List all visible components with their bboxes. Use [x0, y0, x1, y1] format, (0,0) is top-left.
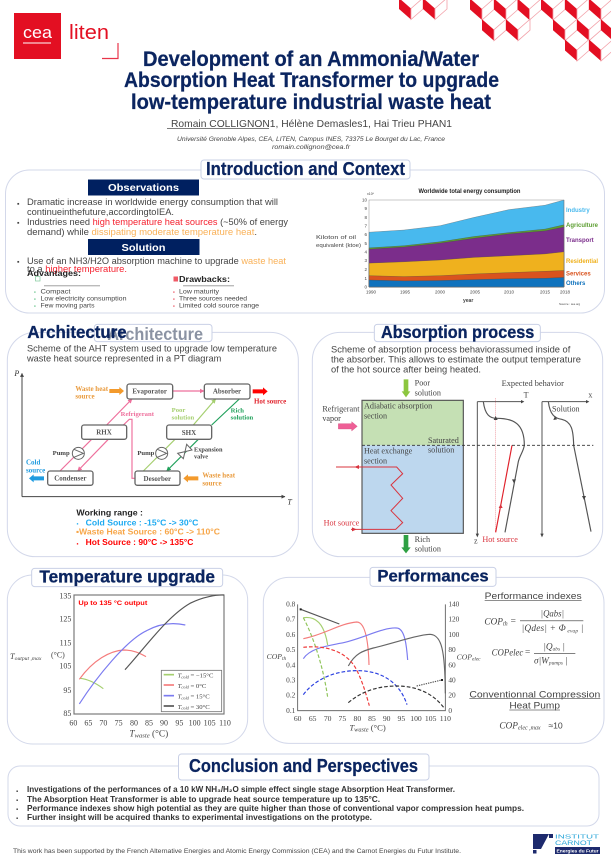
- chart: worldwide total energy consumption: 2: [364, 267, 367, 272]
- chart: worldwide total energy consumption: 1990: [366, 290, 377, 294]
- chart: COP vs waste temperature: elec: [472, 656, 481, 662]
- performance indexes formulas: [484, 591, 583, 667]
- diagram labels: solution: [172, 414, 195, 421]
- advantages: [27, 268, 127, 310]
- chart: COP vs waste temperature: 20: [448, 691, 456, 700]
- performance indexes formulas: COPelec: [492, 648, 523, 658]
- advantages: ▪: [34, 290, 36, 294]
- chart: worldwide total energy consumption: 2000: [435, 290, 446, 294]
- chart: COP vs waste temperature: 0.2: [286, 691, 296, 700]
- observations text: demand) while dissipating moderate temperature heat.: [27, 226, 257, 237]
- expected behavior graphs: z: [474, 537, 478, 546]
- performance indexes formulas: pumps: [548, 661, 563, 667]
- panel: architecture: [7, 322, 298, 557]
- chart: COP vs waste temperature: 0.5: [286, 645, 296, 654]
- observations text: Dramatic increase in worldwide energy consumption that will: [27, 196, 278, 207]
- chart: COP vs waste temperature: 80: [354, 714, 361, 723]
- performance indexes formulas: |: [560, 642, 565, 652]
- chart: worldwide total energy consumption: 4: [364, 250, 367, 254]
- PT diagram: Desorber: [144, 475, 171, 483]
- drawbacks: Drawbacks:: [179, 275, 230, 284]
- chart: output temperature vs waste temperature: 105: [59, 662, 71, 671]
- absorber section diagram: section: [364, 456, 387, 465]
- conventional compression heat pump: [469, 689, 600, 732]
- affiliations: [177, 136, 446, 151]
- panel: performances: [263, 567, 604, 743]
- working range: Hot Source : 90°C -> 135°C: [86, 537, 193, 547]
- legend: cold: [181, 695, 190, 700]
- chart: COP vs waste temperature: 0.3: [286, 675, 296, 684]
- performance indexes formulas: |: [563, 657, 568, 667]
- logo: cea: cea: [23, 23, 53, 42]
- absorption description: Scheme of absorption process behaviorassumed inside of: [331, 344, 571, 354]
- conclusion bullets: Performance indexes show high potential as they are quite higher than those of conventional vapor compression heat pumps.: [27, 803, 524, 813]
- heading: solution: Solution: [122, 242, 166, 254]
- PT diagram: P: [13, 369, 19, 378]
- PT diagram: Absorber: [213, 388, 241, 396]
- chart: COP vs waste temperature: COP: [457, 652, 472, 661]
- performance indexes formulas: =: [511, 616, 516, 626]
- performance indexes formulas: evap: [566, 628, 578, 634]
- PT diagram: SHX: [182, 429, 196, 437]
- chart: COP vs waste temperature: 85: [368, 714, 376, 723]
- absorber section diagram: Rich: [415, 535, 430, 544]
- chart: output temperature vs waste temperature: (°C): [51, 650, 65, 659]
- chart: worldwide total energy consumption: 10: [362, 198, 367, 202]
- icon: expansion valve: [178, 444, 192, 459]
- authors: Romain COLLIGNON1, Hélène Demasles1, Hai Trieu PHAN1: [171, 118, 452, 130]
- absorber section diagram: Hot source: [324, 519, 360, 528]
- chart: COP vs waste temperature: 95: [398, 714, 405, 723]
- diagram labels: [26, 385, 286, 488]
- chart: worldwide total energy consumption: 2005: [470, 290, 481, 294]
- conclusion bullets: Further insight will be acquired thanks to experimental investigations on the prototype.: [27, 812, 372, 822]
- chart: COP vs waste temperature: 65: [309, 714, 317, 723]
- observations text: [17, 196, 288, 237]
- conventional compression heat pump: Conventionnal Compression: [469, 689, 600, 699]
- chart: worldwide total energy consumption: x10⁶: [367, 192, 375, 196]
- absorber section diagram: section: [364, 411, 387, 420]
- diagram labels: solution: [231, 414, 254, 421]
- chart: worldwide total energy consumption: Others: [566, 281, 586, 287]
- drawbacks: ▪: [173, 296, 175, 302]
- heading: architecture (overlapping): [27, 322, 212, 344]
- diagram labels: source: [26, 466, 45, 474]
- title: low-temperature industrial waste heat: [131, 91, 491, 114]
- chart: COP vs waste temperature: 90: [383, 714, 391, 723]
- architecture description: waste heat source represented in a PT diagram: [26, 353, 222, 363]
- working range: ▪: [77, 521, 79, 527]
- advantages: ▪: [34, 304, 36, 308]
- chart: COP vs waste temperature: 60: [294, 714, 302, 723]
- advantages: Advantages:: [27, 268, 81, 278]
- absorber section diagram: Heat exchange: [364, 447, 413, 456]
- legend: cold: [181, 706, 190, 711]
- legend: T: [178, 704, 181, 711]
- chart: output temperature vs waste temperature: 100: [189, 719, 201, 728]
- affiliations: Université Grenoble Alpes, CEA, LITEN, Campus INES, 73375 Le Bourget du Lac, France: [177, 136, 446, 143]
- chart: COP vs waste temperature: 80: [448, 645, 456, 654]
- performance indexes formulas: |: [578, 624, 583, 634]
- conclusion bullets: ▪: [16, 789, 18, 795]
- chart: COP vs waste temperature: T: [349, 723, 354, 733]
- heading: observations: [88, 180, 199, 196]
- diagram labels: source: [75, 393, 95, 401]
- chart: worldwide total energy consumption: 8: [364, 215, 367, 220]
- chart: worldwide total energy consumption: Agriculture: [566, 223, 599, 229]
- chart: worldwide total energy consumption: Worldwide total energy consumption: [418, 188, 521, 195]
- chart: COP vs waste temperature: 100: [448, 630, 460, 639]
- solution text: Use of an NH3/H2O absorption machine to upgrade waste heat: [27, 255, 286, 266]
- heading: architecture (overlapping): Architecture: [27, 322, 127, 342]
- chart: worldwide total energy consumption: Residential: [566, 259, 598, 265]
- arrows: heat flows: [29, 387, 268, 482]
- chart: COP vs waste temperature: th: [282, 656, 286, 662]
- diagram labels: Rich: [231, 407, 244, 414]
- chart: COP vs waste temperature: 75: [339, 714, 346, 723]
- conventional compression heat pump: elec ,max: [518, 726, 541, 732]
- diagram labels: valve: [194, 454, 208, 461]
- drawbacks: ▪: [173, 290, 175, 294]
- observations text: ▪: [17, 201, 20, 208]
- absorber section diagram: Poor: [415, 379, 430, 388]
- chart: worldwide total energy consumption: equivalent (ktoe): [316, 243, 361, 249]
- performance indexes formulas: |Q: [543, 642, 553, 652]
- legend: T: [178, 673, 181, 680]
- absorption description: the absorber. This allows to estimate the output temperature: [331, 355, 581, 365]
- affiliations: romain.collignon@cea.fr: [272, 144, 351, 151]
- chart: worldwide total energy consumption: Kiloton of oil: [316, 235, 356, 241]
- saturation line: [362, 444, 593, 447]
- conclusion bullets: ▪: [16, 807, 18, 813]
- title: Development of an Ammonia/Water: [143, 48, 479, 71]
- absorber section diagram: [322, 379, 463, 554]
- PT diagram: Condenser: [54, 475, 86, 483]
- diagram labels: Refrigerant: [121, 411, 155, 418]
- chart: COP vs waste temperature: 0: [448, 706, 452, 715]
- expected behavior graphs: T: [524, 390, 529, 399]
- panel: conclusion and perspectives: [8, 754, 599, 826]
- solution text: to a higher temperature.: [27, 263, 127, 274]
- chart: worldwide total energy consumption: Services: [566, 272, 591, 278]
- legend: = 0°C: [189, 683, 207, 690]
- panel: introduction and context: [6, 159, 604, 313]
- PT diagram: RHX: [96, 428, 112, 436]
- conventional compression heat pump: COP: [499, 721, 518, 731]
- title: [124, 48, 499, 114]
- performance indexes formulas: th: [503, 622, 508, 628]
- chart: worldwide total energy consumption: 9: [364, 206, 367, 211]
- chart: worldwide total energy consumption: 6: [364, 232, 367, 237]
- diagram labels: Pump: [53, 450, 70, 457]
- chart: output temperature vs waste temperature: 85: [63, 709, 71, 718]
- working range: [76, 508, 220, 547]
- diagram labels: Pump: [137, 450, 155, 457]
- heading: temperature upgrade: Temperature upgrade: [39, 566, 215, 586]
- diagram labels: Waste heat: [75, 385, 109, 393]
- logo: institut carnot: [533, 834, 600, 854]
- architecture description: Scheme of the AHT system used to upgrade low temperature: [27, 344, 277, 354]
- expected behavior graphs: Solution: [552, 404, 580, 413]
- chart: output temperature vs waste temperature: [10, 591, 231, 740]
- conclusion bullets: ▪: [16, 798, 18, 804]
- expected behavior graphs: Expected behavior: [502, 379, 564, 388]
- working range: Cold Source : -15°C -> 30°C: [86, 517, 198, 527]
- conventional compression heat pump: Heat Pump: [509, 701, 560, 711]
- chart: worldwide total energy consumption: 1: [364, 276, 367, 281]
- chart: output temperature vs waste temperature: 90: [160, 719, 168, 728]
- advantages: Compact: [40, 288, 71, 296]
- drawbacks: Limited cold source range: [179, 302, 259, 310]
- chart: worldwide total energy consumption: 2015: [540, 290, 551, 294]
- heading: architecture (overlapping): Architecture: [107, 324, 203, 344]
- chart: output temperature vs waste temperature: 60: [69, 719, 77, 728]
- chart: COP vs waste temperature: 120: [448, 615, 460, 624]
- chart: COP vs waste temperature: 40: [448, 675, 456, 684]
- drawbacks: Low maturity: [179, 288, 220, 296]
- drawbacks: Three sources needed: [179, 296, 247, 302]
- diagram labels: source: [202, 480, 222, 488]
- chart: worldwide total energy consumption: 5: [364, 241, 367, 246]
- chart: output temperature vs waste temperature: 75: [115, 719, 123, 728]
- chart: COP vs waste temperature: 0.8: [286, 600, 296, 609]
- absorber section diagram: solution: [415, 388, 441, 397]
- logo: institut carnot: CARNOT: [555, 841, 592, 847]
- heading: solution: [88, 239, 200, 255]
- conclusion bullets: ▪: [16, 816, 18, 822]
- chart: output temperature vs waste temperature: 65: [84, 719, 92, 728]
- chart: worldwide total energy consumption: 7: [364, 224, 367, 228]
- legend: = 30°C: [189, 704, 210, 711]
- performance indexes formulas: σ|W: [534, 657, 549, 667]
- absorber section diagram: Adiabatic absorption: [364, 402, 432, 411]
- chart: COP vs waste temperature: COP: [267, 652, 282, 661]
- chart: output temperature vs waste temperature: output ,max: [15, 656, 42, 662]
- logo: institut carnot: INSTITUT: [555, 834, 600, 840]
- absorption description: of the hot source after being heated.: [331, 365, 481, 375]
- logo: liten: [69, 22, 118, 58]
- observations text: continueinthefuture,accordingtoIEA.: [27, 206, 174, 217]
- logo: cea: [14, 13, 61, 59]
- absorber section diagram: Saturated: [428, 436, 459, 445]
- chart: output temperature vs waste temperature: 125: [59, 615, 71, 624]
- chart: worldwide total energy consumption: [316, 188, 599, 306]
- legend: T: [178, 694, 181, 701]
- chart: COP vs waste temperature: 60: [448, 660, 456, 669]
- expected behavior graphs: Hot source: [482, 535, 518, 544]
- absorber section diagram: Refrigerant: [322, 404, 360, 413]
- heading: performances: Performances: [377, 567, 489, 586]
- heading: introduction and context: Introduction and Context: [206, 159, 405, 179]
- performance indexes formulas: abs: [553, 646, 560, 652]
- conclusion bullets: Investigations of the performances of a 10 kW NH₃/H₂O simple effect single stage Absorption Heat Transformer.: [27, 784, 455, 794]
- working range: ▪: [77, 541, 79, 547]
- PT diagram: [13, 369, 292, 506]
- heading: conclusion and perspectives: Conclusion and Perspectives: [189, 756, 418, 776]
- PT diagram: Evaporator: [132, 388, 167, 396]
- chart: worldwide total energy consumption: 2018: [560, 290, 571, 294]
- conclusion bullets: The Absorption Heat Transformer is able to upgrade heat source temperature up to 135°C.: [27, 794, 380, 804]
- chart: worldwide total energy consumption: 0: [364, 284, 367, 290]
- legend: = −15°C: [189, 673, 214, 680]
- solution text: ▪: [17, 259, 20, 266]
- chart: COP vs waste temperature: 0.1: [286, 706, 296, 715]
- observations text: ▪: [17, 220, 20, 227]
- absorber section diagram: solution: [428, 446, 454, 455]
- performance indexes formulas: Performance indexes: [485, 591, 582, 601]
- expected behavior graphs: x: [588, 390, 592, 399]
- legend: cold: [181, 685, 190, 690]
- working range: ▪Waste Heat Source : 60°C -> 110°C: [76, 526, 220, 536]
- chart: output temperature vs waste temperature: 70: [99, 719, 107, 728]
- chart: COP vs waste temperature: waste: [354, 727, 369, 734]
- chart: output temperature vs waste temperature: (°C): [150, 729, 168, 740]
- chart: output temperature vs waste temperature: 105: [204, 719, 216, 728]
- observations text: Industries need high temperature heat sources (~50% of energy: [27, 216, 288, 227]
- heading: absorption process: Absorption process: [381, 322, 534, 342]
- heading: observations: Observations: [108, 182, 179, 194]
- working range: Working range :: [76, 508, 143, 518]
- diagram labels: Cold: [26, 458, 40, 466]
- absorption description: [331, 344, 581, 375]
- title: Absorption Heat Transformer to upgrade: [124, 69, 499, 92]
- chart: worldwide total energy consumption: 3: [364, 258, 367, 263]
- performance indexes formulas: |Qdes| + Φ: [522, 624, 566, 634]
- chart: output temperature vs waste temperature: waste: [135, 733, 150, 740]
- chart: worldwide total energy consumption: 2010: [504, 290, 515, 294]
- acknowledgement: This work has been supported by the French Alternative Energies and Atomic Energy Commission (CEA) and the Carnot Energies du Futur Institute.: [13, 848, 461, 855]
- chart: output temperature vs waste temperature: 95: [175, 719, 183, 728]
- conclusion bullets: [16, 784, 524, 822]
- icon: pumps: [72, 447, 168, 459]
- conventional compression heat pump: ≈10: [548, 720, 563, 730]
- panel: temperature upgrade: [7, 566, 248, 744]
- chart: COP vs waste temperature: 70: [324, 714, 332, 723]
- chart: COP vs waste temperature: 110: [440, 714, 451, 723]
- chart: output temperature vs waste temperature: 85: [145, 719, 153, 728]
- advantages: ▪: [34, 296, 36, 302]
- logo: liten: liten: [69, 22, 109, 44]
- absorber section diagram: solution: [415, 545, 441, 554]
- architecture description: [26, 344, 277, 363]
- chart: COP vs waste temperature: 0.4: [286, 660, 296, 669]
- chart: output temperature vs waste temperature: Up to 135 °C output: [78, 599, 148, 607]
- chart: output temperature vs waste temperature: 110: [219, 719, 231, 728]
- performance indexes formulas: COP: [484, 617, 503, 627]
- chart: worldwide total energy consumption: year: [463, 298, 473, 304]
- panel: absorption process: [312, 322, 603, 557]
- chart: worldwide total energy consumption: 1995: [400, 290, 411, 294]
- legend: T: [178, 683, 181, 690]
- diagram labels: Expansion: [194, 446, 223, 453]
- chart: output temperature vs waste temperature: 80: [130, 719, 138, 728]
- drawbacks: ▪: [173, 304, 175, 308]
- chart: COP vs waste temperature: [267, 600, 481, 734]
- chart: output temperature vs waste temperature: 115: [60, 638, 71, 647]
- decorative red cubes: [399, 0, 611, 61]
- expected behavior graphs: [474, 379, 592, 546]
- legend: = 15°C: [189, 694, 210, 701]
- chart: output temperature vs waste temperature: T: [129, 730, 135, 740]
- chart: output temperature vs waste temperature: T: [10, 652, 15, 661]
- PT diagram: T: [287, 497, 292, 506]
- chart: COP vs waste temperature: 0.6: [286, 630, 296, 639]
- advantages: Few moving parts: [40, 302, 95, 310]
- advantages: Low electricity consumption: [40, 296, 127, 302]
- chart: COP vs waste temperature: 140: [448, 600, 460, 609]
- legend: [161, 670, 222, 712]
- chart: COP vs waste temperature: (°C): [369, 723, 386, 733]
- diagram labels: Waste heat: [202, 472, 236, 480]
- chart: COP vs waste temperature: 0.7: [286, 615, 296, 624]
- absorber section diagram: vapor: [322, 414, 341, 423]
- drawbacks: [173, 275, 259, 310]
- logo: institut carnot: Energies du Futur: [556, 848, 599, 854]
- chart: COP vs waste temperature: 105: [425, 714, 437, 723]
- chart: output temperature vs waste temperature: 95: [63, 686, 71, 695]
- solution text: [17, 255, 286, 274]
- diagram labels: Hot source: [254, 398, 286, 406]
- chart: output temperature vs waste temperature: 135: [59, 591, 71, 600]
- chart: worldwide total energy consumption: Industry: [566, 208, 590, 214]
- legend: cold: [181, 674, 190, 679]
- chart: worldwide total energy consumption: Transport: [566, 238, 594, 244]
- chart: worldwide total energy consumption: Source : iea.org: [559, 302, 581, 306]
- chart: COP vs waste temperature: 100: [410, 714, 422, 723]
- performance indexes formulas: |Qabs|: [541, 610, 564, 620]
- performance indexes formulas: =: [525, 648, 530, 658]
- diagram labels: Poor: [172, 407, 185, 414]
